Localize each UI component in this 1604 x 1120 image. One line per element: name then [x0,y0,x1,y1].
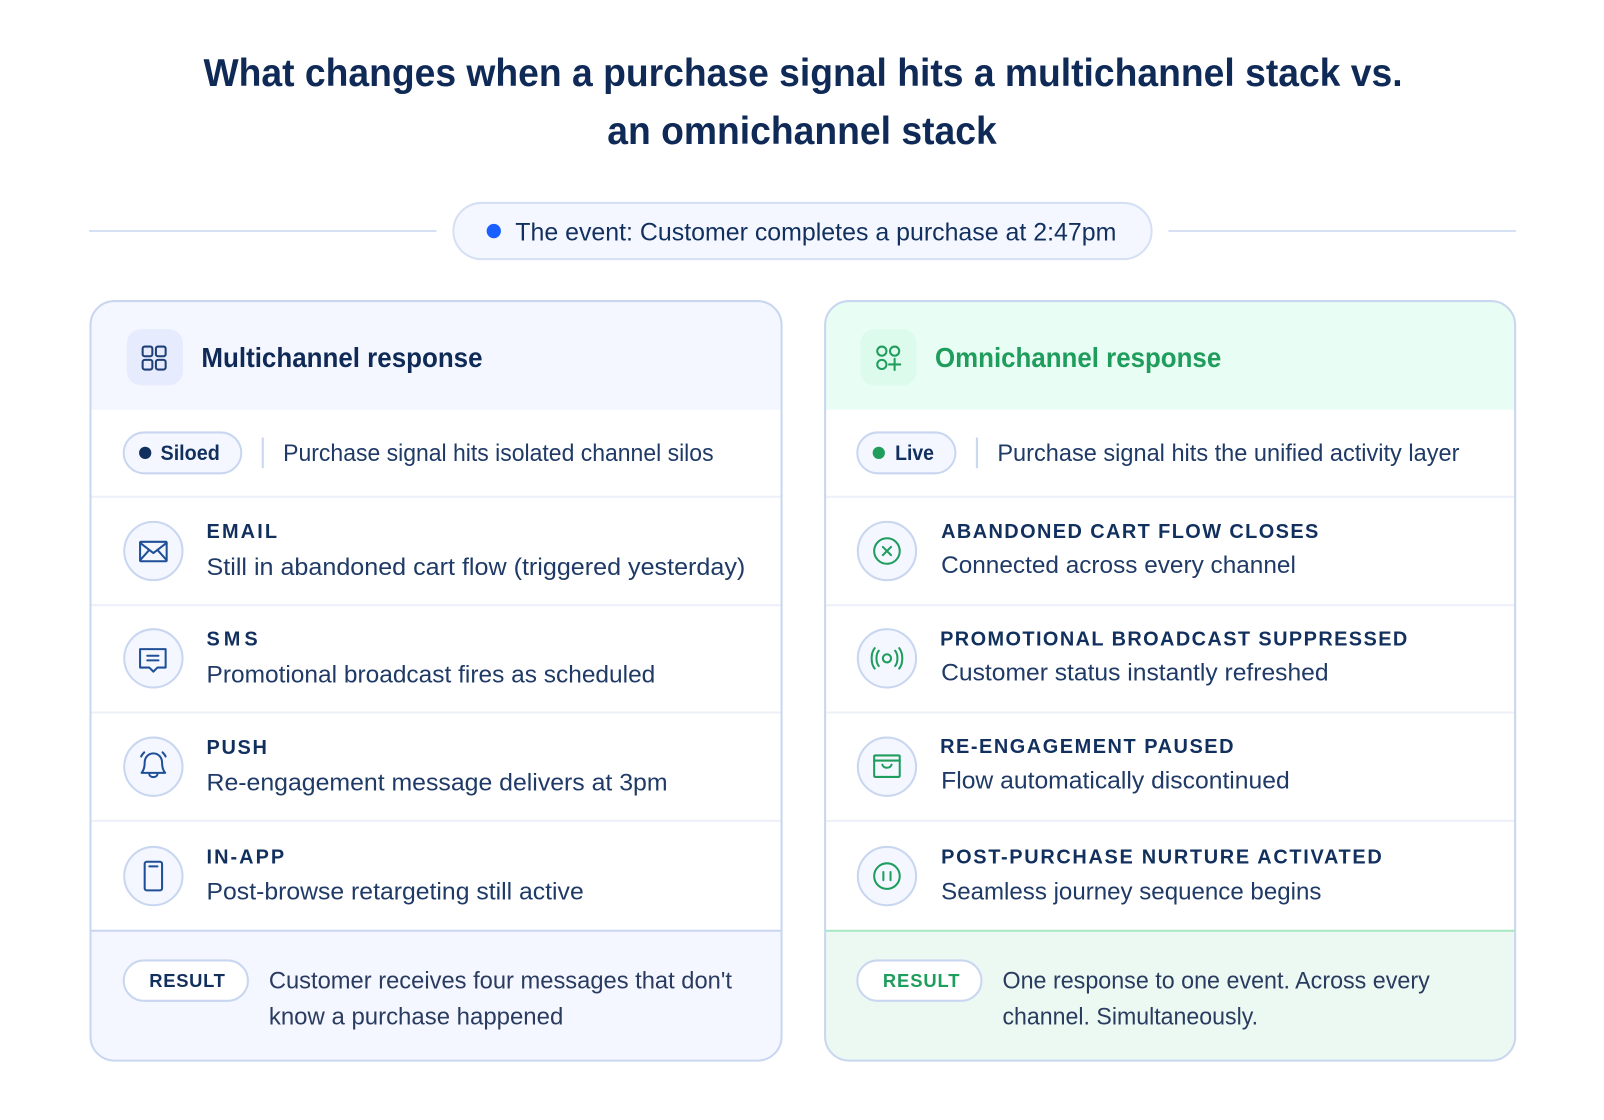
row: email: EMAIL [207,521,277,543]
multichannel result: know a purchase happened [269,1003,563,1030]
omnichannel status row: Purchase signal hits the unified activity layer [997,440,1459,467]
multichannel header: Multichannel response [201,342,483,373]
row: abandoned cart flow closes: ABANDONED CART FLOW CLOSES [941,521,1318,543]
omnichannel result: channel. Simultaneously. [1002,1003,1258,1030]
multichannel status row [124,432,714,473]
row: post-purchase nurture activated [858,846,1382,906]
row: email: Still in abandoned cart flow (triggered yesterday) [207,554,745,581]
row: sms: Promotional broadcast fires as scheduled [207,661,655,688]
panel: multichannel response [90,301,782,1061]
row: push: PUSH [207,737,267,759]
row: sms: SMS [207,629,258,651]
title: an omnichannel stack [607,109,997,153]
row: post-purchase nurture activated: Seamless journey sequence begins [941,879,1321,906]
multichannel status row: Siloed [161,442,220,465]
omnichannel header [825,301,1515,410]
row: sms [124,629,655,688]
omnichannel status row: Live [895,442,934,465]
event pill [453,203,1152,259]
row: push [124,737,668,797]
row: promotional broadcast suppressed [858,629,1407,687]
multichannel result: RESULT [149,970,226,991]
omnichannel status row [857,432,1459,473]
row: email [124,521,745,581]
multichannel result: Customer receives four messages that don't [269,968,732,995]
omnichannel result: RESULT [883,970,960,991]
row: abandoned cart flow closes [858,521,1318,580]
row: abandoned cart flow closes: Connected across every channel [941,552,1296,579]
row: push: Re-engagement message delivers at 3pm [207,770,668,797]
row: promotional broadcast suppressed: PROMOTIONAL BROADCAST SUPPRESSED [940,629,1407,651]
omnichannel result: One response to one event. Across every [1002,968,1430,995]
title [203,51,1403,153]
row: re-engagement paused: RE-ENGAGEMENT PAUSED [940,736,1234,758]
omnichannel result [825,930,1515,1061]
multichannel status row: Purchase signal hits isolated channel silos [283,440,714,467]
panel: omnichannel response [825,301,1515,1061]
row: in-app [124,846,584,906]
row: in-app: IN-APP [207,846,284,868]
row: re-engagement paused: Flow automatically discontinued [941,768,1290,795]
multichannel header [90,301,782,410]
multichannel result [90,930,782,1061]
title: What changes when a purchase signal hits a multichannel stack vs. [203,51,1403,95]
event pill: The event: Customer completes a purchase at 2:47pm [515,219,1116,247]
omnichannel header: Omnichannel response [935,342,1221,373]
row: re-engagement paused [858,736,1290,796]
row: post-purchase nurture activated: POST-PURCHASE NURTURE ACTIVATED [941,846,1382,868]
row: promotional broadcast suppressed: Customer status instantly refreshed [941,659,1329,686]
row: in-app: Post-browse retargeting still active [207,879,584,906]
